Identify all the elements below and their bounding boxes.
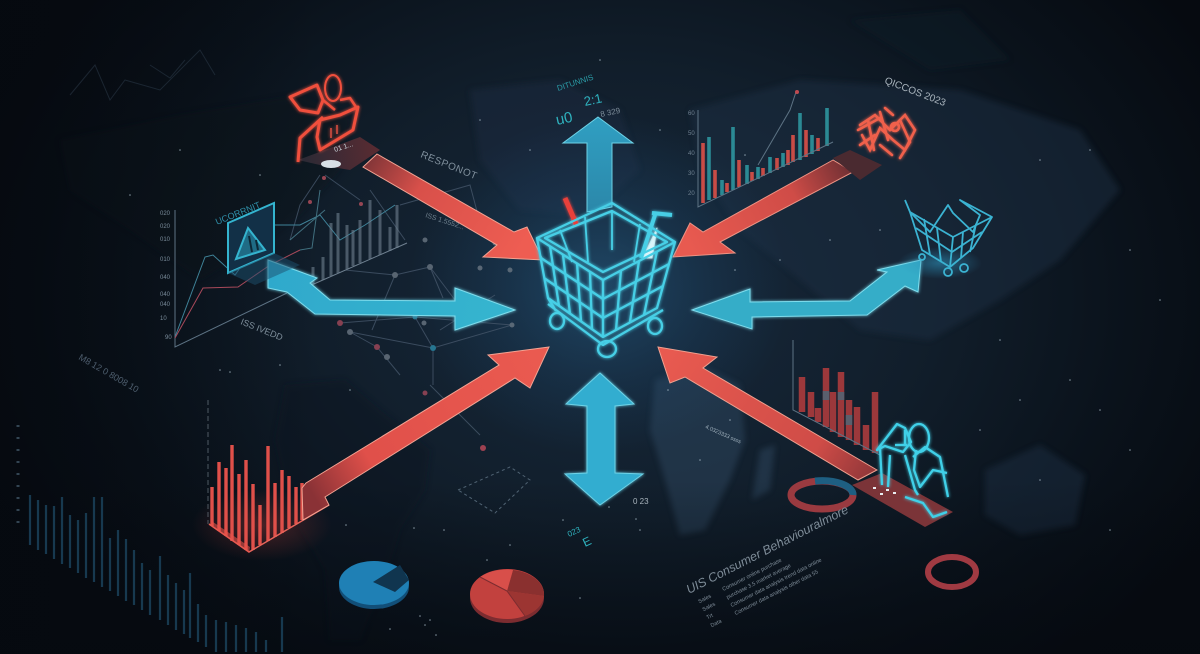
icon: central shopping cart — [537, 198, 675, 357]
icon: blue seated figure on red pedestal — [852, 424, 953, 527]
arrow: blue up — [563, 117, 633, 212]
label: qlccos 2023: QICCOS 2023 — [883, 76, 947, 109]
text block: us consumer behaviour: Consumer data analysis other data 55 — [734, 569, 819, 617]
pie chart: red — [470, 569, 544, 623]
arrow: blue left to cart — [268, 260, 515, 330]
text block: us consumer behaviour: Consumer data analysis trend data online — [730, 557, 823, 609]
chart: left line chart — [160, 190, 395, 347]
text block: us consumer behaviour: Data — [710, 618, 724, 629]
icon: warning panel — [228, 203, 300, 285]
chart axis ticks: 50 — [688, 131, 695, 137]
cart basket — [537, 238, 675, 337]
chart: bottom-right red bars — [793, 340, 880, 455]
label: bottom arrow — [566, 497, 649, 550]
icon: red tangled figures — [833, 108, 915, 180]
label: up arrow figures: u0 — [554, 109, 574, 129]
label: left faded: M8 12 0 8008 10 — [77, 352, 141, 395]
text block: us consumer behaviour: UIS Consumer Behaviouralmore — [684, 502, 851, 597]
arrow: blue right from small cart — [692, 260, 921, 329]
ring chart: lower — [928, 557, 976, 587]
scattered data dots — [130, 60, 1160, 635]
chart axis labels: 040 — [160, 302, 171, 308]
label: iss group: ISS 1.5552... — [424, 212, 465, 231]
ring chart: upper — [791, 481, 853, 509]
chart axis labels: 020 — [160, 211, 171, 217]
icon: red box with figure on pedestal: 01 1... — [333, 141, 354, 154]
chart axis labels: 010 — [160, 237, 171, 243]
cart wheels — [550, 313, 564, 329]
chart axis labels — [160, 211, 172, 341]
chart baseline grey — [307, 243, 407, 287]
text block: us consumer behaviour: Trt — [706, 613, 715, 621]
label: ucorrnit: UCORRNIT — [214, 200, 262, 227]
chart: top red and teal bars — [688, 90, 833, 207]
chart axis labels: 10 — [160, 316, 167, 322]
icon: red box with figure on pedestal — [290, 75, 380, 170]
dim chart tick marks — [16, 425, 20, 530]
pie chart: blue — [339, 561, 409, 609]
chart axis labels: 010 — [160, 257, 171, 263]
label: up arrow figures: 8 329 — [600, 106, 622, 119]
arrow: red top-right to cart — [673, 160, 853, 257]
label: up arrow figures: 2:1 — [583, 91, 603, 109]
arrow: red bottom-left to cart — [302, 347, 549, 520]
chart: grey bars left — [313, 200, 397, 284]
chart axis ticks: 40 — [688, 151, 695, 157]
chart: dim blue bars far left — [30, 495, 282, 652]
label: responot: RESPONOT — [419, 150, 479, 182]
text block: us consumer behaviour: purchase 3.5 market average — [726, 563, 792, 601]
label: iss ivedd: ISS IVEDD — [239, 317, 285, 343]
text block: us consumer behaviour: Consumer online purchase — [722, 558, 783, 593]
icon: small shopping cart — [898, 200, 992, 279]
chart axis ticks — [688, 111, 695, 197]
chart: glowing red bars bottom left — [192, 400, 332, 561]
cart rim — [537, 203, 675, 280]
network graph — [290, 175, 514, 451]
arrow: red top-left to cart — [363, 154, 543, 260]
arrow: red bottom-right to cart — [658, 347, 877, 480]
label: dashed data panel — [458, 467, 530, 513]
top-left line charts trace — [70, 50, 215, 100]
chart axis ticks: 20 — [688, 191, 695, 197]
arrow: blue double headed down — [565, 373, 643, 505]
label: bottom arrow: E — [580, 534, 594, 550]
cart chassis — [548, 298, 663, 345]
central glow — [410, 115, 790, 455]
text block: us consumer behaviour: Sales — [698, 593, 713, 605]
chart axis labels: 020 — [160, 224, 171, 230]
cart items — [565, 198, 577, 226]
label: top centre: DITUNNIS — [556, 73, 595, 93]
chart axis labels: 040 — [160, 275, 171, 281]
label: bottom arrow: 023 — [566, 525, 582, 539]
chart axis labels: 90 — [165, 335, 172, 341]
text block: us consumer behaviour: Sales — [702, 601, 717, 613]
network nodes — [308, 176, 514, 451]
label: africa small text: 4.0323333 ssss — [704, 424, 742, 446]
chart axis ticks: 60 — [688, 111, 695, 117]
text block: us consumer behaviour — [684, 502, 868, 631]
label: bottom arrow: 0 23 — [633, 497, 649, 506]
chart axis ticks: 30 — [688, 171, 695, 177]
chart axis labels: 040 — [160, 292, 171, 298]
label: up arrow figures — [554, 91, 622, 129]
